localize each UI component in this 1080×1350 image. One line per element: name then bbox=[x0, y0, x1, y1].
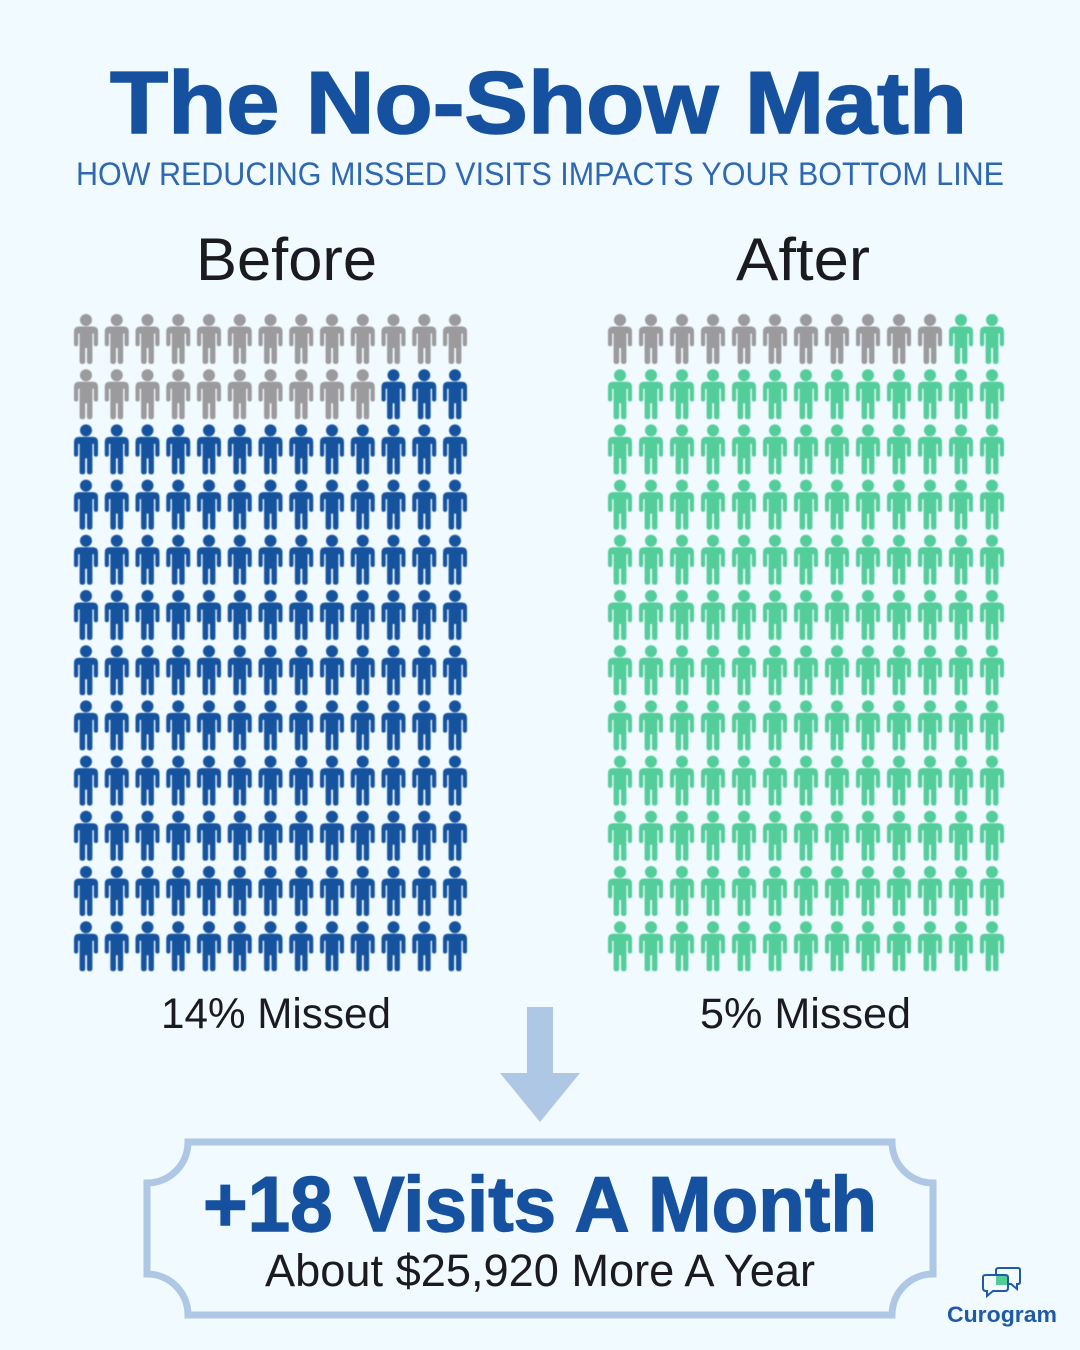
icon: chat bubbles bbox=[983, 1268, 1020, 1296]
label: 14% missed: 14% Missed bbox=[161, 990, 391, 1038]
arrow: down bbox=[500, 1007, 580, 1122]
heading: after: After bbox=[736, 226, 870, 293]
result headline: +18 Visits A Month bbox=[203, 1160, 877, 1248]
result frame bbox=[147, 1142, 933, 1315]
logo: Curogram bbox=[947, 1268, 1057, 1327]
wordmark: Curogram bbox=[947, 1302, 1057, 1327]
heading: before: Before bbox=[196, 226, 377, 293]
pictogram: before, 14% missed bbox=[74, 314, 467, 971]
subtitle: HOW REDUCING MISSED VISITS IMPACTS YOUR BOTTOM LINE bbox=[76, 156, 1004, 192]
result detail: About $25,920 More A Year bbox=[265, 1245, 815, 1296]
label: 5% missed: 5% Missed bbox=[700, 990, 911, 1038]
pictogram: after, 5% missed bbox=[608, 314, 1004, 971]
title: The No-Show Math bbox=[110, 53, 967, 152]
